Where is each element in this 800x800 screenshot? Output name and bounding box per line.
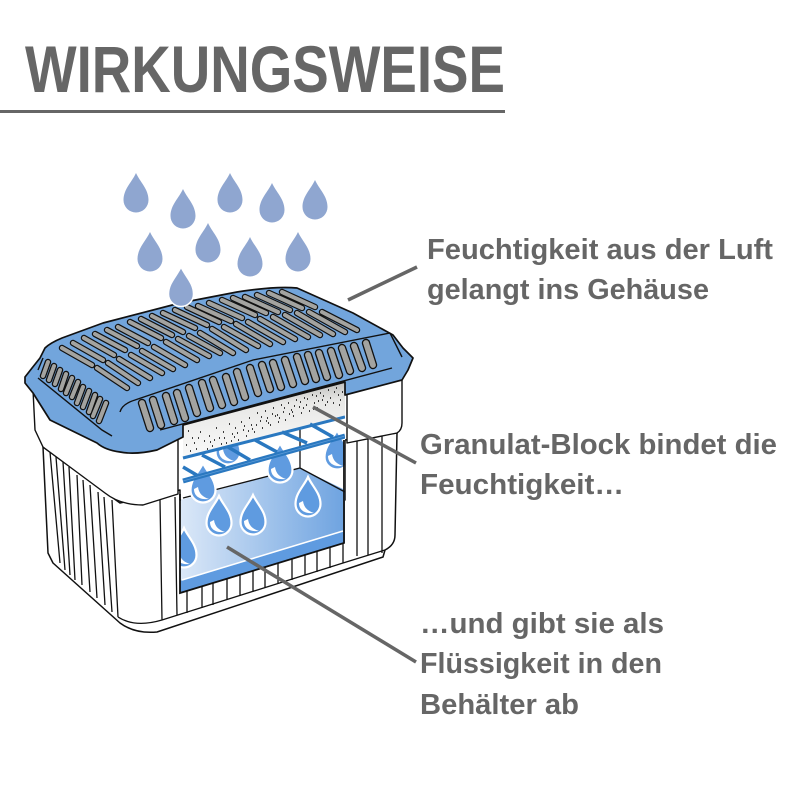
leader line: liquid bbox=[227, 547, 416, 662]
drop entering lid bbox=[168, 267, 194, 306]
label: liquid: Flüssigkeit in den bbox=[420, 648, 662, 680]
falling water drops bbox=[124, 173, 328, 276]
blue grate bbox=[183, 417, 345, 458]
label: granulate: Feuchtigkeit… bbox=[420, 469, 624, 501]
water reservoir bbox=[181, 468, 345, 580]
granulate block bbox=[183, 382, 345, 457]
drops inside bbox=[216, 446, 240, 464]
dehumidifier box bbox=[25, 288, 413, 632]
lid slots bbox=[43, 292, 373, 428]
leader line: granulate bbox=[313, 407, 416, 463]
label: moisture bbox=[427, 234, 774, 306]
window frame bbox=[180, 440, 344, 593]
leader line: air moisture bbox=[348, 267, 417, 300]
label: granulate bbox=[420, 429, 777, 501]
title underline bbox=[0, 110, 505, 113]
label: granulate: Granulat-Block bindet die bbox=[420, 429, 777, 461]
label: moisture: gelangt ins Gehäuse bbox=[427, 274, 709, 306]
title: WIRKUNGSWEISE bbox=[25, 32, 505, 106]
label: liquid bbox=[420, 608, 664, 721]
container lower body bbox=[43, 433, 397, 632]
lid bbox=[25, 288, 413, 453]
container ribs bbox=[50, 435, 385, 623]
label: moisture: Feuchtigkeit aus der Luft bbox=[427, 234, 774, 266]
label: liquid: Behälter ab bbox=[420, 689, 579, 721]
lid rim lines bbox=[38, 333, 402, 436]
label: liquid: …und gibt sie als bbox=[420, 608, 664, 640]
cutaway window bbox=[180, 383, 345, 592]
container upper band bbox=[33, 375, 402, 505]
